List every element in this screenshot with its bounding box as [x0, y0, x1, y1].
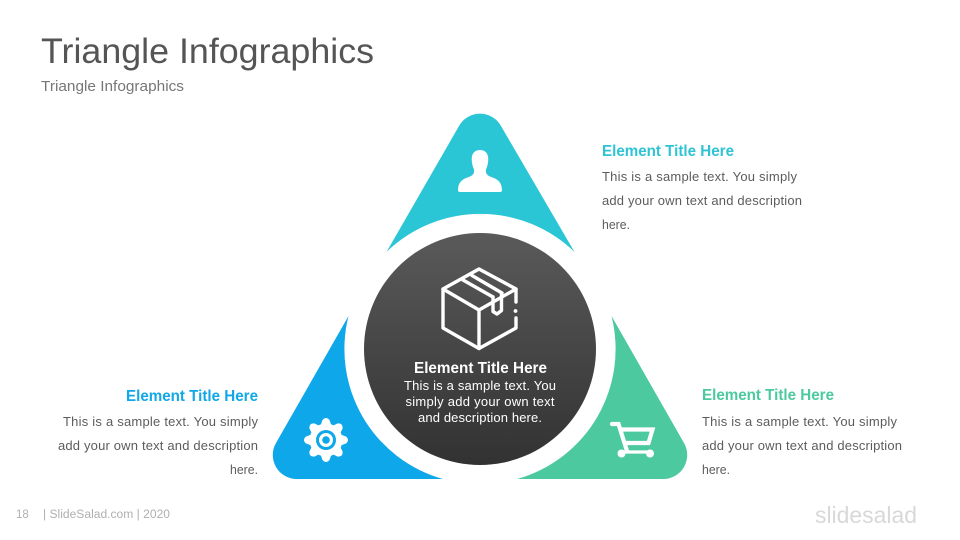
centre text block: [404, 360, 556, 425]
text block: left element: add your own text and description: [58, 438, 258, 453]
centre text block: and description here.: [418, 410, 542, 425]
icon: gear: [304, 418, 348, 462]
text block: top element: add your own text and description: [602, 193, 802, 208]
centre text block: simply add your own text: [406, 394, 555, 409]
centre text block: This is a sample text. You: [404, 378, 556, 393]
text block: top element: Element Title Here: [602, 143, 734, 160]
triangle segment: bottom right: [517, 316, 687, 479]
text block: right element: [702, 387, 902, 477]
footer page info: 18: [16, 509, 29, 521]
icon: package box: [443, 269, 517, 348]
icon: person: [458, 150, 502, 192]
text block: top element: here.: [602, 217, 630, 232]
centre text block: Element Title Here: [414, 360, 547, 377]
text block: right element: This is a sample text. You simply: [702, 414, 898, 429]
centre circle: [364, 233, 596, 465]
subtitle: Triangle Infographics: [41, 78, 184, 95]
footer page info: | SlideSalad.com | 2020: [43, 509, 170, 521]
text block: top element: This is a sample text. You simply: [602, 169, 798, 184]
text block: right element: add your own text and description: [702, 438, 902, 453]
text block: left element: here.: [230, 462, 258, 477]
text block: left element: This is a sample text. You simply: [63, 414, 258, 429]
triangle segment: top: [386, 114, 574, 252]
text block: top element: [602, 143, 802, 232]
title: Triangle Infographics: [41, 32, 374, 71]
brand logo: slidesalad: [815, 502, 917, 528]
triangle segment: bottom left: [273, 316, 443, 479]
text block: right element: here.: [702, 462, 730, 477]
icon: shopping cart: [612, 424, 654, 458]
text block: left element: [58, 388, 258, 477]
text block: left element: Element Title Here: [126, 388, 258, 405]
text block: right element: Element Title Here: [702, 387, 834, 404]
